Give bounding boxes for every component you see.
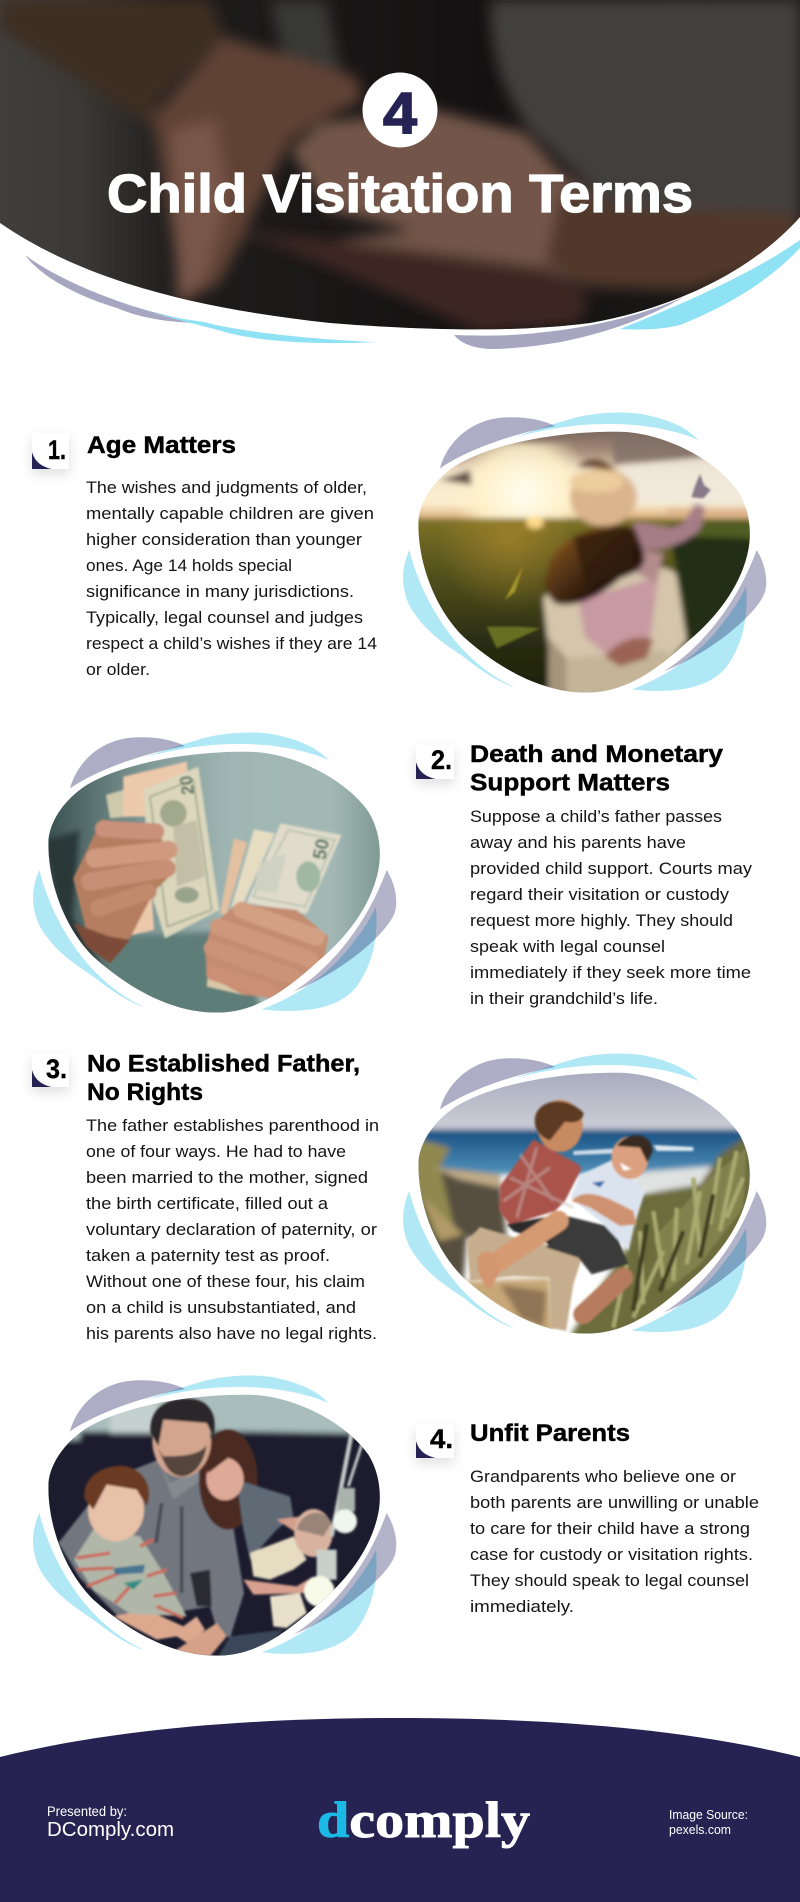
heading 3 [87,1050,360,1106]
body text 4: both parents are unwilling or unable [470,1493,759,1512]
section 1: age matters [32,412,770,698]
number badge 1: 1. [48,435,66,465]
body text 3 [86,1116,379,1343]
photo 2: hands holding money: 50 [308,837,333,861]
footer [0,1718,800,1902]
body text 3: The father establishes parenthood in [86,1116,379,1135]
body text 3: Without one of these four, his claim [86,1272,365,1291]
header swoosh: right gray [454,297,684,349]
body text 1 [86,478,377,679]
photo 3: father and son laughing on the dunes [400,1053,770,1341]
section 2: death and monetary support [30,732,753,1020]
header swoosh: left gray [25,255,204,323]
body text 2: speak with legal counsel [470,937,665,956]
number badge 3: 3. [46,1054,67,1084]
number badge 4 [416,1424,454,1458]
body text 1: higher consideration than younger [86,530,362,549]
photo 2: hands holding money: 20 [175,774,198,796]
image source [669,1807,748,1837]
dcomply logo: dcomply [317,1793,530,1849]
presented by: Presented by: [47,1804,127,1819]
number badge 3 [32,1054,69,1087]
number badge 2: 2. [431,745,452,775]
section 4: unfit parents [30,1375,759,1663]
body text 1: ones. Age 14 holds special [86,556,292,575]
body text 2: immediately if they seek more time [470,963,751,982]
presented by: DComply.com [47,1819,174,1841]
body text 2: in their grandchild’s life. [470,989,658,1008]
body text 3: taken a paternity test as proof. [86,1246,330,1265]
body text 2 [470,807,753,1008]
heading 1: Age Matters [87,432,236,459]
header swoosh: right blue [620,240,800,330]
body text 4: They should speak to legal counsel [470,1571,749,1590]
body text 3: been married to the mother, signed [86,1168,368,1187]
body text 1: or older. [86,660,150,679]
heading 2: Support Matters [470,770,670,796]
image source: Image Source: [669,1807,748,1822]
body text 4: case for custody or visitation rights. [470,1545,753,1564]
title: Child Visitation Terms [107,164,693,224]
number badge 1 [32,433,69,469]
body text 2: away and his parents have [470,833,686,852]
number circle: 4 [383,81,417,146]
body text 3: one of four ways. He had to have [86,1142,346,1161]
body text 3: his parents also have no legal rights. [86,1324,377,1343]
photo 4: family on a sofa [30,1375,400,1663]
body text 1: respect a child’s wishes if they are 14 [86,634,377,653]
body text 1: The wishes and judgments of older, [86,478,367,497]
body text 2: Suppose a child’s father passes [470,807,722,826]
body text 1: Typically, legal counsel and judges [86,608,363,627]
number badge 2 [416,745,454,779]
body text 3: the birth certificate, filled out a [86,1194,329,1213]
body text 2: regard their visitation or custody [470,885,730,904]
body text 4: Grandparents who believe one or [470,1467,736,1486]
body text 2: request more highly. They should [470,911,733,930]
photo 1: child on shoulders at sunset [400,412,770,698]
body text 3: voluntary declaration of paternity, or [86,1220,377,1239]
presented by [47,1804,174,1841]
body text 4: to care for their child have a strong [470,1519,750,1538]
header photo: hands [0,0,800,340]
heading 2: Death and Monetary [470,741,723,768]
heading 4: Unfit Parents [470,1420,630,1447]
header swoosh: left blue [107,297,377,343]
body text 2: provided child support. Courts may [470,859,753,878]
body text 4 [470,1467,759,1616]
section 3: no established father [32,1050,770,1343]
body text 1: significance in many jurisdictions. [86,582,354,601]
image source: pexels.com [669,1822,731,1837]
body text 3: on a child is unsubstantiated, and [86,1298,356,1317]
number badge 4: 4. [430,1424,453,1454]
number circle [362,72,438,148]
heading 2 [470,741,723,796]
heading 3: No Rights [87,1079,203,1106]
body text 4: immediately. [470,1597,574,1616]
body text 1: mentally capable children are given [86,504,374,523]
footer background [0,1718,800,1902]
heading 3: No Established Father, [87,1050,360,1078]
photo 2: hands holding money [30,732,400,1020]
